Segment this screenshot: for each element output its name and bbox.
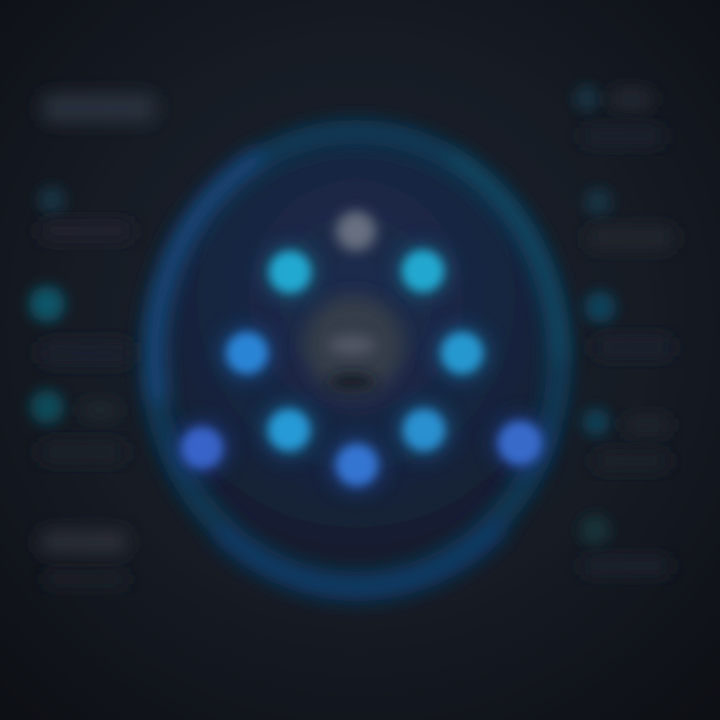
left text 5 <box>44 572 128 586</box>
panel: hub disc <box>151 135 561 585</box>
right text 5 <box>582 557 670 575</box>
node ring right <box>490 413 550 473</box>
node lower right <box>394 400 454 460</box>
group: hub nodes <box>172 211 550 495</box>
node upper right <box>393 241 453 301</box>
central hub shadow <box>328 374 376 390</box>
central hub disc <box>304 295 404 395</box>
node middle left <box>217 323 277 383</box>
right text 3 <box>594 337 672 357</box>
right text 2 <box>588 227 674 249</box>
right icon 2 <box>584 188 612 216</box>
node middle right <box>432 323 492 383</box>
left text 2 <box>40 342 132 364</box>
right icon 3 <box>584 291 616 323</box>
right icon 1 <box>574 85 600 111</box>
group: right column <box>574 85 674 575</box>
node ring left <box>172 418 232 478</box>
central hub glyph <box>328 335 376 355</box>
left icon 3 <box>30 390 64 424</box>
right text 1 <box>582 127 664 145</box>
left text 1 <box>40 222 132 240</box>
node bottom <box>327 435 387 495</box>
node top <box>336 211 376 251</box>
left heading bottom <box>40 530 128 554</box>
left text 3 <box>82 402 118 418</box>
right text 4 <box>594 452 668 470</box>
left text 4 <box>40 442 124 462</box>
left icon 1 <box>38 186 66 214</box>
group: left column <box>29 94 156 586</box>
node lower left <box>259 400 319 460</box>
left icon 2 <box>29 286 65 322</box>
group: central hub <box>304 295 404 395</box>
outer ring <box>153 132 560 589</box>
left heading <box>42 94 156 122</box>
right label 4 <box>624 417 670 433</box>
right icon 5 <box>580 515 610 545</box>
right label 1 <box>610 90 652 108</box>
node upper left <box>260 242 320 302</box>
right icon 4 <box>582 408 610 436</box>
